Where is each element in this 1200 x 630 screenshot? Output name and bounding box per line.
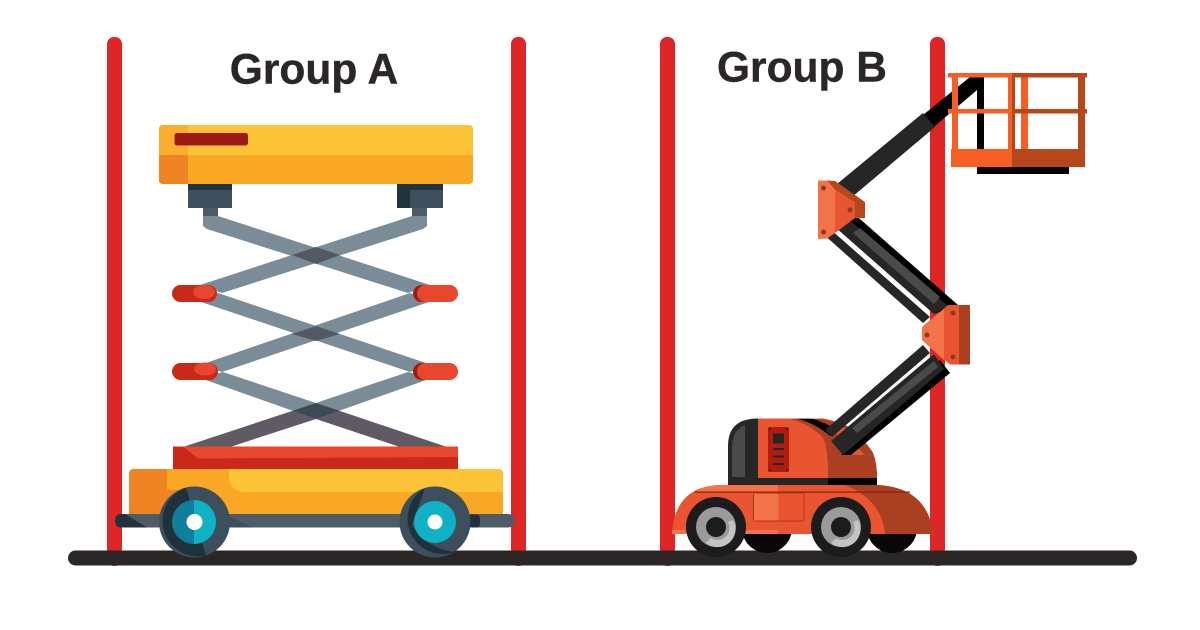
upper platform xyxy=(159,125,473,184)
wheel left xyxy=(159,486,230,558)
upper knob right xyxy=(413,285,458,302)
red posts: group A right xyxy=(511,37,526,566)
rear wheels xyxy=(742,503,917,553)
lower body xyxy=(672,485,933,534)
yellow chassis xyxy=(129,469,503,514)
scissor arms xyxy=(183,205,447,447)
middle boom xyxy=(822,212,958,323)
red posts: group B right xyxy=(930,37,945,566)
heading: Group A: Group A xyxy=(230,46,398,94)
upper knob left xyxy=(172,285,217,302)
platform mount left xyxy=(188,184,232,208)
basket xyxy=(948,73,1087,174)
body door panel xyxy=(754,493,804,521)
rear wheel xyxy=(811,497,871,557)
upper boom xyxy=(837,113,935,197)
heading: Group B: Group B xyxy=(717,44,887,92)
middle joint xyxy=(922,305,970,364)
scissor lift xyxy=(115,125,515,558)
ground line xyxy=(68,550,1137,566)
basket support arm xyxy=(918,77,984,149)
control panel xyxy=(768,427,789,472)
axle bar xyxy=(115,514,515,528)
boom lift xyxy=(672,73,1087,557)
front wheel xyxy=(686,497,746,557)
lower boom xyxy=(825,345,950,455)
lower knob left xyxy=(172,362,218,380)
platform mount right xyxy=(397,184,443,208)
upper joint xyxy=(818,180,865,239)
red lift base xyxy=(173,446,458,470)
wheel right xyxy=(400,486,470,558)
lower knob right xyxy=(413,363,458,380)
red posts: group A left xyxy=(107,37,122,566)
cab xyxy=(728,418,877,485)
red posts: group B left xyxy=(660,37,675,566)
